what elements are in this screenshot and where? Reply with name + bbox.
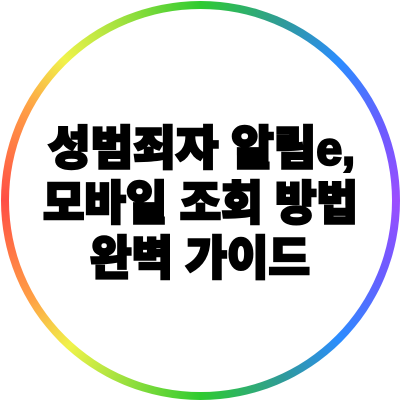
title line 1: 성범죄자 알림e, [48,122,355,174]
title line 3: 완벽 가이드 [90,232,310,284]
title line 2: 모바일 조회 방법 [43,178,358,230]
